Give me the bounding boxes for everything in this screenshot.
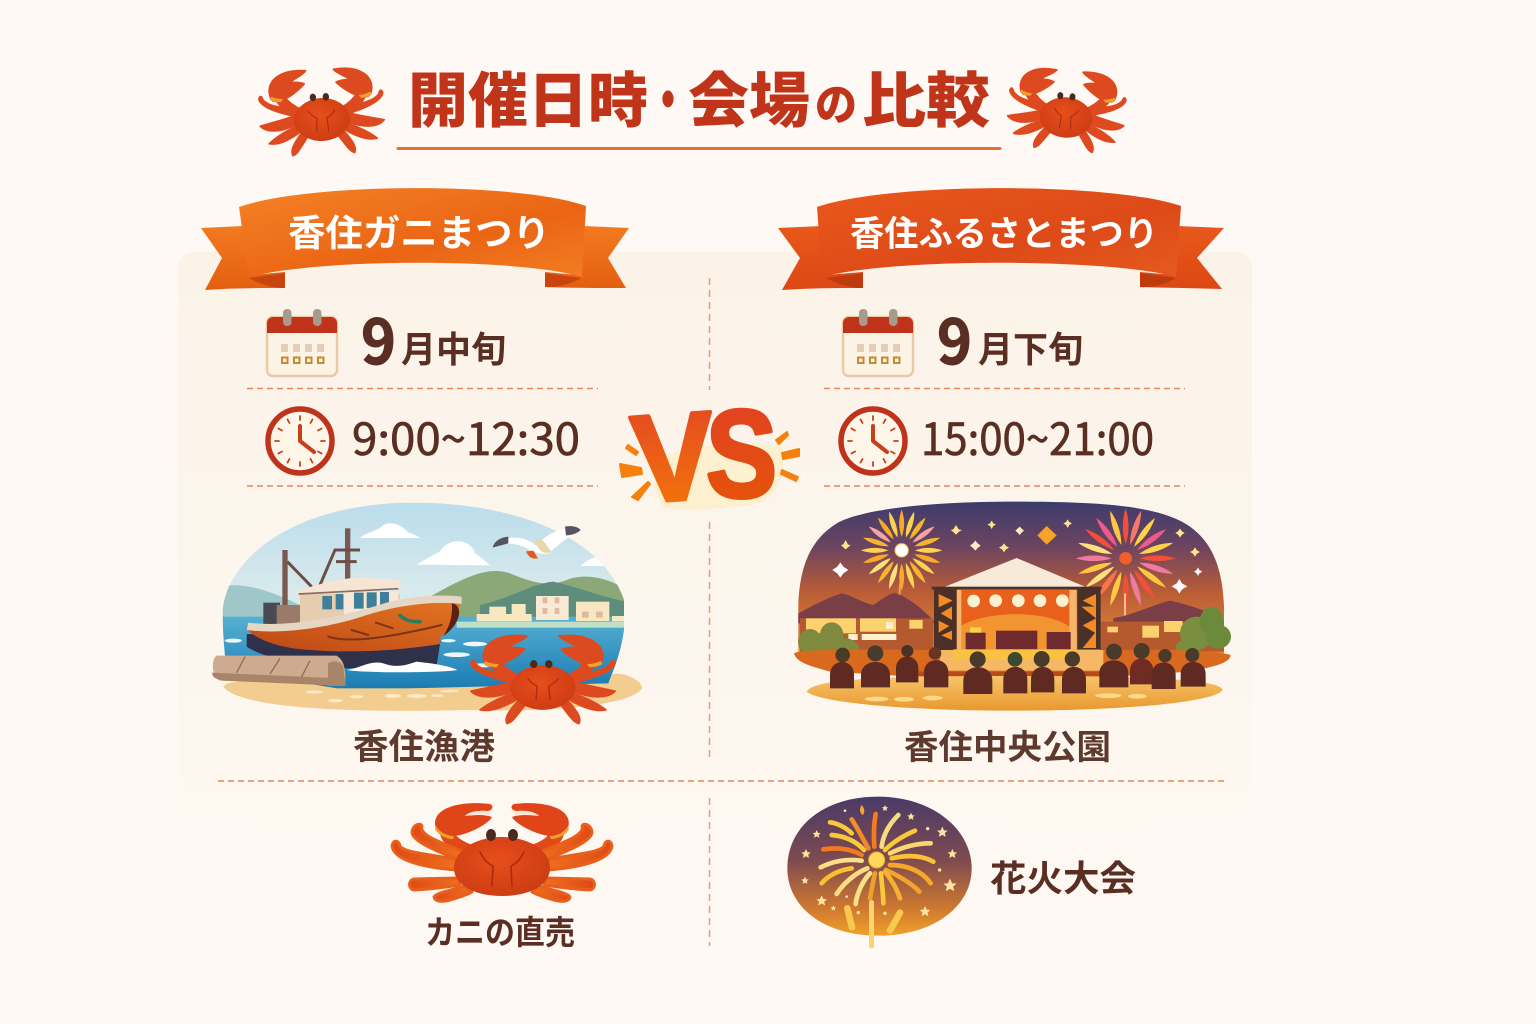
time text: 9:00~12:30 [352, 404, 580, 468]
date text: 9 [937, 292, 972, 382]
seagull [493, 526, 581, 559]
time text: 15:00~21:00 [921, 404, 1154, 468]
illustration: festival park [794, 502, 1231, 711]
ribbon: 香住ふるさとまつり [778, 188, 1224, 290]
dividers [218, 278, 1226, 946]
date text: 9 [361, 292, 396, 382]
title: ・ [648, 53, 688, 140]
title underline [398, 147, 1000, 148]
label: 花火大会: 花火大会 [990, 850, 1136, 902]
date text: 月下旬 [978, 321, 1083, 373]
left time row [268, 404, 580, 473]
icon: title crab right [1005, 66, 1128, 155]
VS badge: V [627, 386, 719, 530]
front ground [807, 676, 1223, 711]
ribbon: 香住ガニまつり: 香住ガニまつり [288, 203, 550, 257]
label: 香住中央公園: 香住中央公園 [904, 720, 1111, 769]
icon: calendar [267, 309, 337, 376]
icon: crab on beach [471, 636, 615, 723]
icon: fireworks fan [787, 797, 972, 948]
VS badge: S [706, 386, 777, 524]
ground bands [794, 650, 1231, 677]
label: 香住漁港: 香住漁港 [353, 719, 495, 770]
fishing boat [246, 528, 462, 672]
illustration: fishing port [212, 500, 642, 711]
firework trail right [1122, 593, 1128, 634]
right date row [843, 292, 1083, 382]
ribbon: 香住ふるさとまつり: 香住ふるさとまつり [850, 206, 1158, 257]
right time row [841, 404, 1154, 473]
left date row [267, 292, 506, 382]
sand beach [223, 674, 642, 711]
infographic canvas [178, 67, 1252, 948]
dusk sky [798, 502, 1224, 653]
sand pebbles [306, 690, 459, 702]
title: 会場 [688, 53, 810, 140]
VS badge [620, 386, 799, 530]
date text [361, 292, 506, 382]
icon: clock [268, 409, 332, 473]
audience [830, 643, 1206, 694]
ground spots [865, 693, 1147, 702]
stage [932, 558, 1102, 659]
firework: yellow [861, 510, 942, 591]
panel: comparison card [178, 252, 1252, 952]
title: 比較 [862, 53, 990, 140]
firework: pink [1076, 508, 1176, 608]
bushes [798, 607, 1231, 659]
pier blocks [212, 656, 345, 686]
town silhouettes [798, 593, 1224, 652]
firework trail left [899, 583, 900, 613]
icon: clock [841, 409, 905, 473]
date text [937, 292, 1083, 382]
date text: 月中旬 [401, 321, 506, 373]
title [408, 53, 990, 140]
icon: crab direct sale [392, 803, 612, 901]
ribbon: 香住ガニまつり [201, 188, 629, 290]
stars [832, 519, 1202, 594]
title: の [815, 69, 857, 133]
label: カニの直売: カニの直売 [425, 906, 575, 954]
harbor scene [220, 500, 627, 688]
icon: calendar [843, 309, 913, 376]
title: 開催日時 [408, 53, 648, 140]
icon: title crab left [257, 66, 386, 157]
